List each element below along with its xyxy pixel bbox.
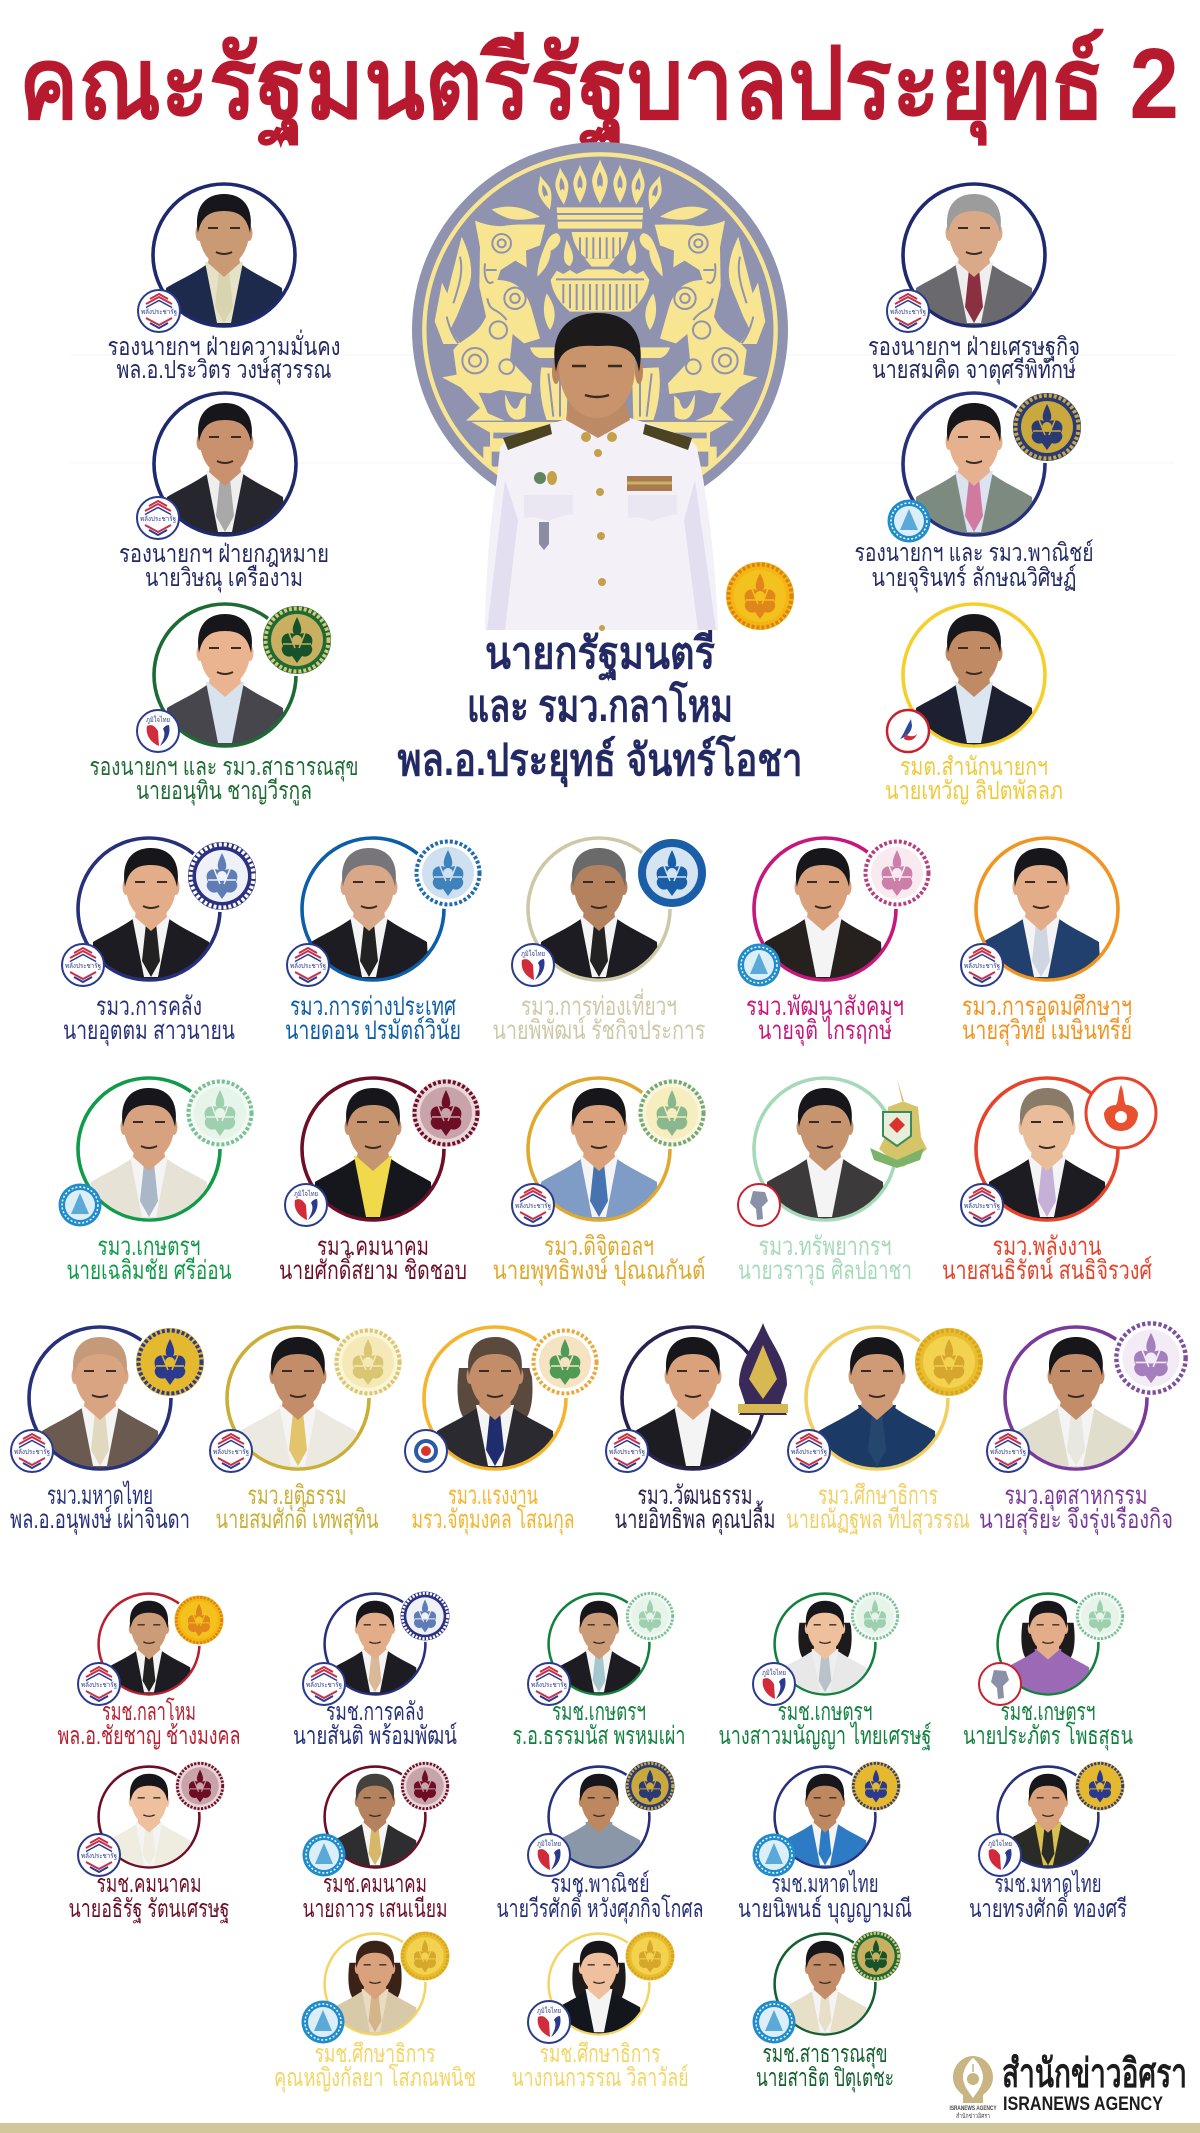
minister: Santi — [293, 1591, 457, 1750]
label — [786, 1480, 970, 1535]
minister: Wissanu — [119, 393, 329, 593]
label: คุณหญิงกัลยา โสภณพนิช — [274, 2063, 476, 2093]
label: รมช.การคลัง — [326, 1698, 424, 1726]
label — [66, 1231, 232, 1285]
party badge — [528, 1663, 570, 1705]
label: รมช.พาณิชย์ — [550, 1870, 650, 1898]
label — [492, 988, 706, 1045]
label: รมว.การต่างประเทศ — [290, 991, 456, 1021]
ministry seal — [1012, 392, 1082, 462]
ministry seal — [637, 838, 707, 908]
ministry seal — [400, 1761, 450, 1811]
label — [285, 991, 461, 1045]
label — [885, 753, 1063, 805]
ministry seal — [625, 1591, 675, 1641]
ministry seal — [862, 838, 932, 908]
label — [746, 991, 904, 1046]
minister: Varawut — [738, 1078, 927, 1286]
label: รมช.คมนาคม — [96, 1870, 202, 1898]
label: รองนายกฯ และ รมว.พาณิชย์ — [854, 539, 1094, 567]
label: รมช.มหาดไทย — [994, 1869, 1102, 1898]
label — [302, 1870, 448, 1923]
agency small text: ISRANEWS AGENCY — [950, 2106, 996, 2112]
party badge — [788, 1430, 830, 1472]
defense seal — [725, 561, 795, 631]
ministry seal — [625, 1761, 675, 1811]
party badge — [303, 1663, 345, 1705]
label: นายดอน ปรมัตถ์วินัย — [285, 1015, 461, 1045]
party badge — [78, 1834, 120, 1876]
party badge — [302, 1834, 346, 1876]
label — [738, 1231, 912, 1286]
minister: Pipat — [492, 838, 707, 1045]
minister: Suriya — [979, 1320, 1190, 1535]
party badge — [738, 1184, 780, 1226]
label: รมว.ทรัพยากรฯ — [758, 1231, 892, 1261]
bottom bar — [0, 2123, 1200, 2133]
label: รมต.สำนักนายกฯ — [900, 753, 1048, 781]
party badge — [137, 710, 179, 752]
label — [756, 2040, 894, 2093]
party badge — [137, 497, 179, 539]
label — [63, 991, 235, 1046]
ministry seal — [411, 1078, 481, 1148]
label: รมว.เกษตรฯ — [98, 1231, 200, 1261]
minister: Prawit — [108, 184, 340, 385]
minister: Juti — [738, 838, 932, 1046]
minister: Weerasak — [496, 1761, 704, 1924]
label: รมช.สาธารณสุข — [762, 2040, 888, 2069]
ministry seal — [851, 1761, 901, 1811]
label: พล.อ.ประวิตร วงษ์สุวรรณ — [116, 356, 332, 385]
ministry seal — [1075, 1761, 1125, 1811]
label: นายอธิรัฐ รัตนเศรษฐ — [68, 1895, 230, 1923]
minister: Chatumongol — [405, 1327, 600, 1535]
minister: Jurin — [854, 392, 1094, 593]
label — [10, 1480, 190, 1535]
label — [119, 540, 329, 593]
label: รมช.มหาดไทย — [772, 1869, 878, 1898]
label — [68, 1870, 230, 1923]
party badge — [961, 944, 1003, 986]
state emblem — [412, 142, 788, 518]
label: นายอนุทิน ชาญวีรกูล — [136, 777, 312, 806]
minister: Chaichan — [58, 1594, 240, 1750]
label — [854, 539, 1094, 593]
label: นายประภัตร โพธสุธน — [963, 1721, 1133, 1751]
label — [90, 753, 358, 806]
ministry seal — [175, 1761, 225, 1811]
isranews agency logo — [950, 2052, 1187, 2120]
ministry seal — [850, 1591, 900, 1641]
party badge — [11, 1430, 53, 1472]
label: พล.อ.อนุพงษ์ เผ่าจินดา — [10, 1504, 190, 1535]
label: รมช.ศึกษาธิการ — [314, 2040, 436, 2068]
party badge — [528, 1834, 570, 1876]
party badge — [738, 944, 780, 986]
label: รมว.การท่องเที่ยวฯ — [521, 988, 677, 1021]
label: รมว.มหาดไทย — [47, 1480, 153, 1510]
label: รมว.คมนาคม — [317, 1231, 429, 1261]
minister: Nataphol — [786, 1327, 984, 1535]
ministry seal — [1086, 1078, 1156, 1148]
minister: Sontirat — [942, 1078, 1156, 1285]
label: รมช.คมนาคม — [323, 1870, 427, 1898]
label — [963, 1698, 1133, 1751]
label: รมว.การอุดมศึกษาฯ — [962, 991, 1132, 1022]
party badge — [888, 500, 930, 542]
party badge — [979, 1834, 1021, 1876]
label — [216, 1480, 379, 1535]
agency small text — [950, 2106, 996, 2120]
label — [738, 1869, 912, 1924]
label: รมว.ยุติธรรม — [248, 1480, 346, 1511]
label: รมว.การคลัง — [96, 991, 202, 1021]
label: นายถาวร เสนเนียม — [302, 1895, 448, 1923]
ministry seal — [333, 1327, 403, 1397]
label — [412, 1480, 574, 1535]
minister: Praphat — [963, 1591, 1133, 1751]
label: รมว.แรงงาน — [448, 1480, 538, 1510]
label: พล.อ.ชัยชาญ ช้างมงคล — [58, 1722, 240, 1750]
label: นายวีรศักดิ์ หวังศุภกิจโกศล — [496, 1890, 704, 1924]
label: นายเฉลิมชัย ศรีอ่อน — [66, 1255, 232, 1285]
label — [274, 2040, 476, 2093]
party badge — [405, 1430, 447, 1472]
label: รองนายกฯ ฝ่ายความมั่นคง — [108, 329, 340, 361]
party badge — [752, 2000, 796, 2044]
label: นายสันติ พร้อมพัฒน์ — [293, 1722, 457, 1750]
minister: Ittipol — [606, 1323, 788, 1535]
minister: Nipon — [738, 1761, 912, 1924]
ministry seal — [851, 1931, 901, 1981]
minister: Mananya — [718, 1591, 932, 1750]
label — [942, 1231, 1152, 1285]
party badge — [606, 1430, 648, 1472]
minister: Buddhipongse — [492, 1078, 707, 1286]
label: นายนิพนธ์ บุญญามณี — [738, 1895, 912, 1924]
party badge — [210, 1430, 252, 1472]
party badge — [979, 1663, 1021, 1705]
name label: พล.อ.ประยุทธ์ จันทร์โอชา — [398, 733, 802, 788]
label: นายอุตตม สาวนายน — [63, 1015, 235, 1046]
party badge — [528, 2001, 570, 2043]
label: นายศักดิ์สยาม ชิดชอบ — [279, 1251, 467, 1285]
party badge — [887, 710, 929, 752]
label — [496, 1870, 704, 1924]
label: รมช.เกษตรฯ — [1000, 1698, 1096, 1726]
minister: Suvit — [961, 838, 1132, 1046]
party badge — [961, 1184, 1003, 1226]
label: รองนายกฯ และ รมว.สาธารณสุข — [90, 753, 358, 782]
label: รมช.เกษตรฯ — [552, 1698, 646, 1726]
party badge — [512, 1184, 554, 1226]
party badge — [78, 1663, 120, 1705]
label — [718, 1698, 932, 1750]
label: นายวิษณุ เครืองาม — [145, 564, 303, 593]
label: นายทรงศักดิ์ ทองศรี — [969, 1890, 1127, 1923]
ministry seal — [400, 1591, 450, 1641]
label: นายอิทธิพล คุณปลื้ม — [614, 1500, 776, 1535]
label — [512, 2040, 688, 2092]
minister: Songsak — [969, 1761, 1127, 1923]
name label — [398, 629, 802, 788]
label: รองนายกฯ ฝ่ายกฎหมาย — [119, 540, 329, 568]
label: นายสุวิทย์ เมษินทรีย์ — [962, 1015, 1132, 1046]
label: นายจุรินทร์ ลักษณวิศิษฏ์ — [872, 564, 1076, 593]
party badge — [62, 944, 104, 986]
party badge — [987, 1430, 1029, 1472]
ministry seal — [530, 1327, 600, 1397]
label: รมว.ดิจิตอลฯ — [544, 1231, 654, 1261]
label — [492, 1231, 706, 1286]
label: นายสมศักดิ์ เทพสุทิน — [216, 1500, 379, 1535]
label: รมช.ศึกษาธิการ — [540, 2040, 660, 2068]
minister: Saksayam — [279, 1078, 481, 1285]
label — [293, 1698, 457, 1750]
ministry seal — [187, 841, 257, 911]
label: นายพิพัฒน์ รัชกิจประการ — [492, 1015, 706, 1045]
minister: Anutin — [90, 604, 358, 806]
ministry crest — [870, 1079, 927, 1168]
minister: Thaworn — [302, 1761, 450, 1923]
minister: Anupong — [10, 1327, 205, 1535]
label: นางกนกวรรณ วิลาวัลย์ — [512, 2064, 688, 2092]
label: นายพุทธิพงษ์ ปุณณกันต์ — [492, 1255, 706, 1286]
label: นางสาวมนัญญา ไทยเศรษฐ์ — [718, 1721, 932, 1750]
ministry seal — [413, 838, 483, 908]
ministry seal — [135, 1327, 205, 1397]
minister: Thammanat — [512, 1591, 686, 1750]
ministry seal — [262, 605, 332, 675]
party badge — [285, 1184, 327, 1226]
label: รมว.วัฒนธรรม — [638, 1480, 752, 1510]
agency small text: สำนักข่าวอิศรา — [956, 2112, 990, 2120]
ministry emblem — [738, 1323, 788, 1415]
label — [868, 333, 1080, 385]
minister: Somsak — [210, 1327, 403, 1535]
label: รมช.กลาโหม — [102, 1697, 196, 1726]
label — [614, 1480, 776, 1535]
name label: นายกรัฐมนตรี — [485, 629, 715, 681]
minister: Don — [285, 838, 483, 1045]
label — [979, 1480, 1173, 1535]
label: รมว.ศึกษาธิการ — [818, 1480, 938, 1510]
party badge — [58, 1184, 102, 1226]
party badge — [753, 1663, 795, 1705]
ministry seal — [1112, 1320, 1190, 1396]
label — [279, 1231, 467, 1285]
label: นายสมคิด จาตุศรีพิทักษ์ — [872, 356, 1076, 385]
label: นายณัฏฐพล ทีปสุวรรณ — [786, 1504, 970, 1535]
portrait — [485, 313, 718, 631]
ministry seal — [185, 1078, 255, 1148]
party badge — [752, 1834, 796, 1876]
ministry seal — [625, 1931, 675, 1981]
ministry seal — [174, 1595, 224, 1645]
label — [969, 1869, 1127, 1923]
minister: Athirat — [68, 1761, 230, 1923]
ministry seal — [637, 1078, 707, 1148]
party badge — [887, 290, 929, 332]
label: รมว.อุตสาหกรรม — [1004, 1480, 1148, 1511]
label: นายวราวุธ ศิลปอาชา — [738, 1255, 912, 1286]
ministry seal — [400, 1931, 450, 1981]
party badge — [138, 290, 180, 332]
label — [512, 1698, 686, 1750]
label — [962, 991, 1132, 1046]
minister: Sathit — [752, 1931, 901, 2093]
ministry seal — [914, 1327, 984, 1397]
name label: และ รมว.กลาโหม — [467, 679, 733, 731]
minister: Somkid — [868, 184, 1080, 385]
party badge — [302, 2000, 344, 2044]
agency name English: ISRANEWS AGENCY — [1003, 2094, 1163, 2115]
minister: Uttama — [62, 838, 257, 1046]
label: มรว.จัตุมงคล โสณกุล — [412, 1504, 574, 1535]
label: รมว.พลังงาน — [992, 1231, 1102, 1261]
label: รองนายกฯ ฝ่ายเศรษฐกิจ — [868, 333, 1080, 361]
minister: Kalaya — [274, 1931, 476, 2093]
minister: Kanokwan — [512, 1931, 688, 2092]
label: รมช.เกษตรฯ — [778, 1698, 872, 1726]
party badge — [287, 944, 329, 986]
minister: Chaloemchai — [58, 1078, 255, 1285]
label — [108, 329, 340, 385]
label: นายจุติ ไกรฤกษ์ — [758, 1015, 892, 1046]
panel: prime minister — [398, 142, 802, 788]
label: นายเทวัญ ลิปตพัลลภ — [885, 777, 1063, 805]
minister: Tewan — [885, 604, 1063, 805]
label: รมว.พัฒนาสังคมฯ — [746, 991, 904, 1021]
label: นายสาธิต ปิตุเตชะ — [756, 2064, 894, 2093]
ministry seal — [1075, 1591, 1125, 1641]
label: ร.อ.ธรรมนัส พรหมเผ่า — [512, 1722, 686, 1750]
icon: pen nib — [953, 2056, 993, 2103]
label — [58, 1697, 240, 1750]
party badge — [512, 944, 554, 986]
